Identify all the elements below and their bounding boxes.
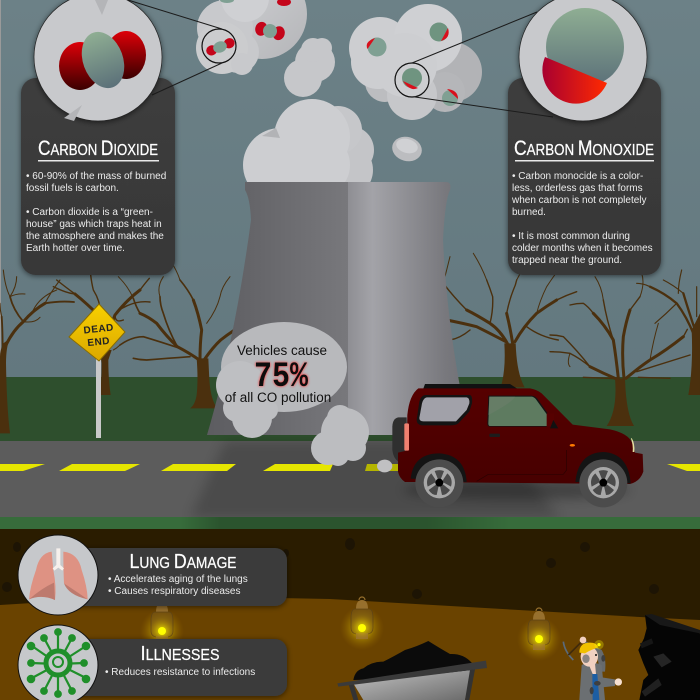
underground brown floor — [0, 598, 700, 700]
wheel arches — [411, 453, 467, 482]
heading: LUNG DAMAGE — [130, 551, 236, 573]
arm raised — [582, 638, 605, 672]
smoke cloud: middle — [284, 38, 335, 97]
text block: colder months when it becomes — [512, 243, 653, 254]
tree far left — [0, 270, 74, 433]
front window — [487, 396, 550, 427]
roof rail — [423, 384, 518, 389]
door seam — [477, 450, 567, 481]
magnified circle with CO2 molecule — [34, 0, 162, 121]
CO2 molecule in cloud 4 — [220, 0, 234, 3]
cooling tower — [207, 182, 470, 435]
yellow road dashes — [0, 464, 700, 471]
underground upper wall — [0, 529, 700, 700]
CO2 molecule in cloud — [204, 36, 236, 58]
front wheel — [579, 459, 627, 507]
text block: • Accelerates aging of the lungs — [108, 574, 248, 585]
bare trees right — [443, 253, 700, 426]
heading: CARBON MONOXIDE — [514, 137, 654, 160]
car body — [398, 388, 643, 484]
text block — [26, 171, 166, 254]
heading: ILLNESSES — [140, 643, 220, 665]
head — [581, 647, 598, 667]
text block: burned. — [512, 207, 546, 218]
text block: • Causes respiratory diseases — [108, 586, 240, 597]
panel background — [508, 78, 661, 275]
cart rim — [337, 661, 487, 687]
panel: carbon monoxide — [395, 0, 661, 275]
panel background — [21, 78, 175, 275]
cart body — [353, 670, 472, 700]
rear window — [417, 395, 472, 425]
text block: • Carbon dioxide is a “green- — [26, 207, 153, 218]
road sign: dead end — [69, 304, 125, 438]
road — [0, 441, 700, 518]
text block: house” gas which traps heat in — [26, 219, 162, 230]
headlight — [631, 438, 634, 452]
zoom leader lines — [128, 0, 222, 95]
icon circle: virus — [18, 625, 98, 700]
car shadow — [403, 480, 630, 500]
tail light — [404, 423, 409, 451]
hard hat — [579, 643, 598, 653]
CO2 molecule in cloud 2 — [254, 21, 286, 41]
panel: lung damage — [18, 535, 287, 615]
mine cart with coal — [337, 641, 487, 700]
CO2 molecule in cloud 3 — [277, 0, 291, 6]
indicator — [570, 444, 575, 447]
arm forward — [602, 677, 615, 687]
vehicle smoke callout — [216, 322, 347, 438]
vehicles text: Vehicles cause — [237, 343, 327, 358]
magnified circle with CO molecule — [519, 0, 647, 121]
tree behind sign — [53, 275, 150, 395]
zoom leader lines — [412, 12, 553, 117]
background sky — [0, 0, 700, 378]
CO molecule in cloud 2 — [430, 22, 449, 42]
grass field — [0, 377, 700, 442]
road sign: dead end: DEAD — [83, 322, 114, 337]
mirror — [547, 413, 554, 427]
tree right of tower — [443, 253, 577, 387]
CO molecule in cloud 1 — [367, 38, 386, 56]
exhaust puff — [377, 460, 392, 472]
of all CO pollution: of all CO pollution — [225, 390, 331, 405]
spare wheel — [392, 417, 407, 462]
neck — [588, 663, 596, 674]
lanterns — [140, 597, 561, 661]
road sign: dead end: END — [87, 336, 111, 349]
tree far right — [637, 270, 700, 395]
shirt — [592, 674, 599, 700]
icon circle: lungs — [18, 535, 98, 615]
text block: • 60-90% of the mass of burned — [26, 171, 166, 182]
panel: carbon dioxide — [21, 0, 236, 275]
smoke cloud: right with molecules — [349, 4, 482, 120]
heading: CARBON DIOXIDE — [38, 137, 158, 160]
pickaxe — [563, 641, 583, 660]
text block: • Reduces resistance to infections — [105, 667, 255, 678]
tree centre right — [550, 273, 690, 426]
magnifier ring small — [395, 63, 429, 97]
grass strip — [0, 517, 700, 530]
text block: the atmosphere and makes the — [26, 231, 164, 242]
CO molecule in cloud 4 — [442, 89, 458, 106]
text block — [108, 574, 248, 597]
road shadow — [190, 441, 560, 518]
wall rocks — [2, 538, 659, 599]
miner — [563, 637, 622, 700]
coal smudges — [590, 655, 605, 694]
smoke puff behind car — [311, 405, 369, 466]
car — [377, 384, 643, 507]
smoke plume above tower — [243, 99, 374, 182]
small smoke puff — [389, 134, 425, 164]
raised hand — [580, 637, 586, 643]
text block: when carbon is not completely — [511, 195, 647, 206]
text block: trapped near the ground. — [512, 255, 622, 266]
text block: • Carbon monocide is a color- — [512, 171, 643, 182]
coal pile — [353, 641, 473, 680]
panel background — [60, 548, 287, 606]
tree left of tower — [113, 260, 253, 408]
coal wall — [638, 614, 700, 700]
magnifier ring small — [202, 29, 236, 63]
bare trees left — [0, 260, 253, 433]
text block: • It is most common during — [512, 231, 630, 242]
door handle — [489, 434, 500, 437]
panel: illnesses — [18, 625, 287, 700]
CO molecule in cloud 3 — [402, 68, 422, 89]
text block: fossil fuels is carbon. — [26, 183, 119, 194]
text block: less, orderless gas that forms — [512, 183, 643, 194]
rear wheel — [415, 459, 463, 507]
75 percent: 75% — [254, 357, 309, 397]
coat — [579, 662, 605, 700]
panel background — [60, 639, 287, 696]
text block: Earth hotter over time. — [26, 243, 125, 254]
text block — [511, 171, 653, 266]
smoke cloud: left with molecules — [196, 0, 307, 75]
hand — [615, 678, 622, 686]
